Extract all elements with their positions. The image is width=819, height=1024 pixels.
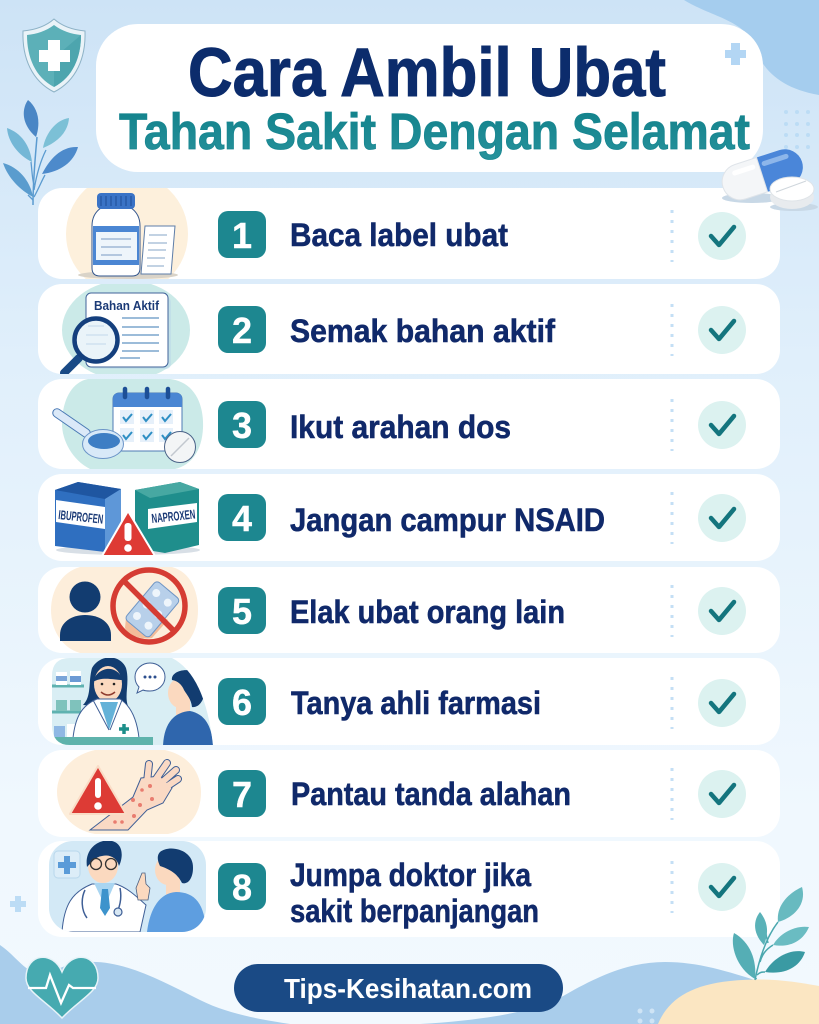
icon: plant bottom right [733, 887, 809, 980]
step number 2: 2 [232, 310, 252, 351]
step number 8: 8 [232, 867, 252, 908]
icon: medicine boxes with warning [55, 482, 200, 556]
row 3: Ikut arahan dos [38, 379, 780, 469]
label 6: Tanya ahli farmasi [291, 685, 541, 721]
footer website pill [234, 964, 563, 1012]
step number 4: 4 [232, 498, 252, 539]
icon: spoon, calendar, pill [57, 379, 203, 469]
step number 5 [218, 587, 266, 634]
dotted divider and check 2 [672, 304, 746, 356]
row 1: Baca label ubat [38, 188, 780, 279]
dotted divider and check 1 [672, 210, 746, 262]
icon: pharmacist talking to patient [50, 658, 220, 748]
dotted divider and check 3 [672, 399, 746, 451]
icon: capsule and tablet [717, 145, 818, 211]
icon: heart with pulse line [26, 957, 98, 1018]
label 4: Jangan campur NSAID [290, 502, 605, 538]
step number 3 [218, 401, 266, 448]
row 2: Semak bahan aktif [38, 280, 780, 380]
panel: title [96, 24, 763, 172]
icon: plus [725, 43, 746, 65]
label 2: Semak bahan aktif [290, 313, 555, 349]
dotted divider and check 4 [672, 492, 746, 544]
icon: medicine boxes with warning: IBUPROFEN [58, 507, 104, 527]
step number 6: 6 [232, 682, 252, 723]
step number 6 [218, 678, 266, 725]
dotted divider and check 5 [672, 585, 746, 637]
step number 1 [218, 211, 266, 258]
icon: medicine bottle and leaflet [66, 188, 188, 279]
label 8: sakit berpanjangan [290, 893, 539, 929]
row 4: Jangan campur NSAID [38, 474, 780, 561]
row 7: Pantau tanda alahan [38, 750, 780, 837]
icon: document and magnifier: Bahan Aktif [94, 299, 160, 313]
title line 1: Cara Ambil Ubat [188, 34, 666, 111]
step number 2 [218, 306, 266, 353]
row 5: Elak ubat orang lain [38, 567, 780, 653]
row 6: Tanya ahli farmasi [38, 658, 780, 748]
label 7: Pantau tanda alahan [291, 776, 571, 812]
label 8: Jumpa doktor jika [290, 857, 531, 893]
title line 2: Tahan Sakit Dengan Selamat [119, 103, 750, 160]
row 8: Jumpa doktor [38, 840, 780, 937]
step number 3: 3 [232, 405, 252, 446]
icon: small plus left [10, 896, 26, 912]
dotted divider and check 7 [672, 768, 746, 820]
decorative dot grid [784, 110, 810, 149]
icon: shield with cross [23, 19, 85, 92]
dotted divider and check 8 [672, 861, 746, 913]
label 3: Ikut arahan dos [290, 409, 511, 445]
label 8 [290, 857, 539, 929]
step number 7: 7 [232, 774, 252, 815]
icon: medicine boxes with warning: NAPROXEN [151, 506, 196, 526]
icon: warning and rash on arm [57, 750, 201, 834]
icon: doctor speaking with patient [49, 840, 206, 932]
step number 4 [218, 494, 266, 541]
step number 1: 1 [232, 215, 252, 256]
step number 5: 5 [232, 591, 252, 632]
step number 7 [218, 770, 266, 817]
website text: Tips-Kesihatan.com [284, 973, 532, 1004]
icon: leaf sprig left [3, 100, 78, 205]
decorative bottom dots [638, 1008, 654, 1024]
label 1: Baca label ubat [290, 217, 508, 253]
icon: document and magnifier [62, 280, 190, 380]
dotted divider and check 6 [672, 677, 746, 729]
step number 8 [218, 863, 266, 910]
icon: person and prohibited pills [51, 567, 198, 653]
label 5: Elak ubat orang lain [290, 594, 565, 630]
